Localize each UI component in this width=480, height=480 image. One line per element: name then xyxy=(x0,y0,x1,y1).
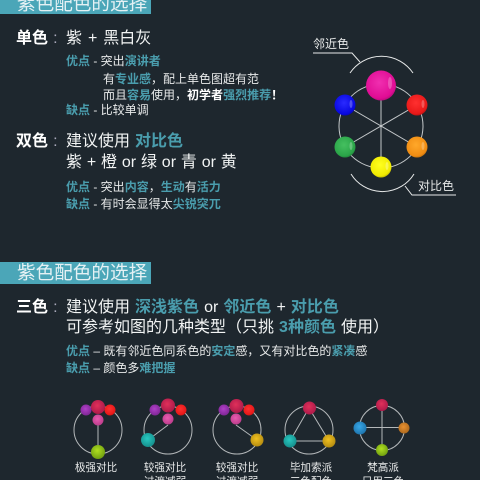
ball: yellow xyxy=(370,156,392,178)
caption 2 xyxy=(144,462,186,480)
label: three colours: 三色 : xyxy=(16,299,58,316)
caption 1: 极强对比 xyxy=(75,462,117,474)
single colour cons: 缺点 - 比较单调 xyxy=(66,103,149,117)
small wheel 4 xyxy=(284,402,336,454)
single colour pros line 3: 而且容易使用，初学者强烈推荐！ xyxy=(103,88,283,102)
small wheel 3 xyxy=(213,399,264,454)
three colours pros: 优点 – 既有邻近色同系色的安定感，又有对比色的紧凑感 xyxy=(66,344,367,358)
label: two colours: 双色 : xyxy=(16,133,58,150)
ball: red xyxy=(406,94,428,116)
two colours formula: 紫 + 橙 or 绿 or 青 or 黄 xyxy=(66,154,237,171)
caption 3: 较强对比 xyxy=(216,462,258,474)
three colours note: 可参考如图的几种类型（只挑 3种颜色 使用） xyxy=(66,319,389,336)
small wheel 2 xyxy=(141,398,192,454)
small wheel 5 xyxy=(354,399,410,456)
single colour formula: 紫 + 黑白灰 xyxy=(66,30,151,47)
ball: green xyxy=(334,136,356,158)
label: single colour: 单色 : xyxy=(16,30,58,47)
caption 3 xyxy=(216,462,258,480)
two colours cons: 缺点 - 有时会显得太尖锐突兀 xyxy=(66,197,221,211)
caption 2: 较强对比 xyxy=(144,462,186,474)
two colours advice: 建议使用 对比色 xyxy=(66,133,183,150)
section header: second: 紫色配色的选择 xyxy=(17,262,147,283)
label: contrast: 对比色 xyxy=(418,179,454,193)
caption 4 xyxy=(290,462,332,480)
single colour pros line 1: 优点 - 突出演讲者 xyxy=(66,54,161,68)
caption 4: 毕加索派 xyxy=(290,462,332,474)
ball: blue xyxy=(334,94,356,116)
label: analogous: 邻近色 xyxy=(313,37,349,51)
caption 5 xyxy=(362,462,404,480)
caption 5: 梵高派 xyxy=(367,462,399,474)
ball: magenta xyxy=(366,70,396,100)
ball: orange xyxy=(406,136,428,158)
single colour pros line 2: 有专业感，配上单色图超有范 xyxy=(103,72,259,86)
small wheel 1 xyxy=(74,400,122,459)
three colours cons: 缺点 – 颜色多难把握 xyxy=(66,361,175,375)
two colours pros: 优点 - 突出内容，生动有活力 xyxy=(66,180,221,194)
three colours advice: 建议使用 深浅紫色 or 邻近色 + 对比色 xyxy=(66,299,339,316)
